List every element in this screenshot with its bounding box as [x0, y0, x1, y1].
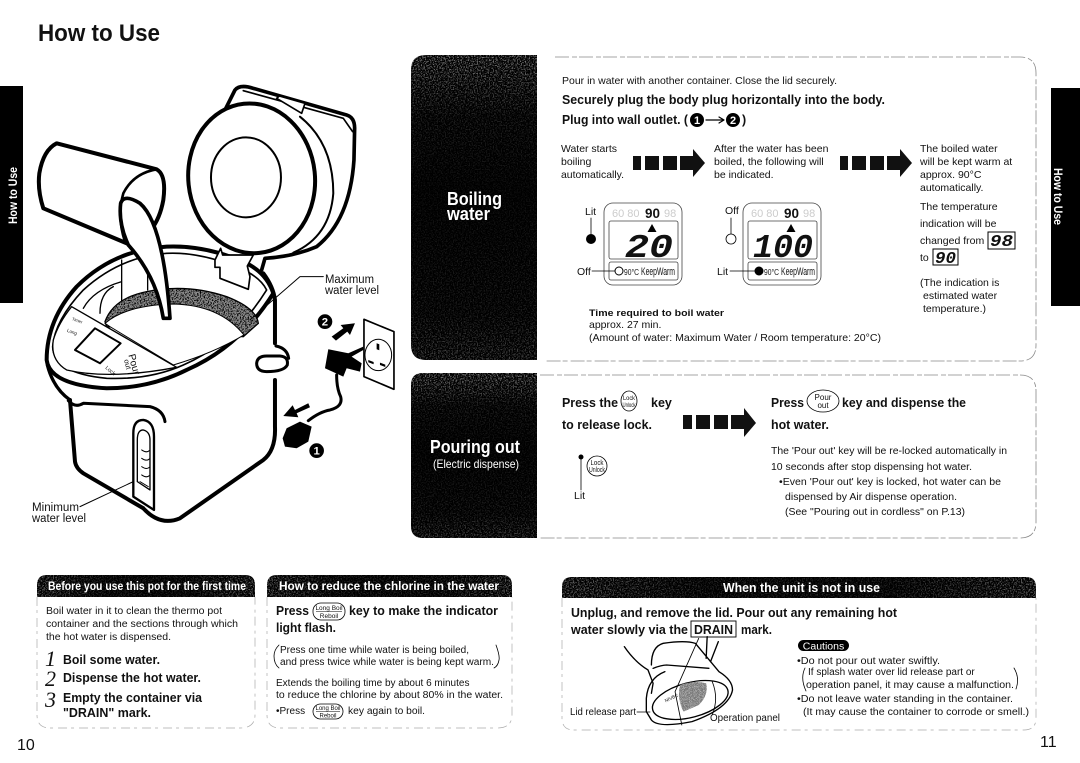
lock key indicator: Lit — [574, 490, 585, 502]
label: minimum water level — [31, 502, 86, 525]
arrow: plug into body — [283, 403, 310, 417]
label: off with circle — [725, 205, 739, 244]
temperature note: to — [920, 252, 929, 264]
bold instruction: Securely plug the body plug horizontally into the body. — [562, 93, 885, 107]
step: press pour out: Pour — [815, 393, 832, 402]
lid hinge — [215, 248, 253, 289]
heading with key — [276, 603, 498, 635]
display: 100: KeepWarm — [781, 266, 815, 278]
numbered steps: Dispense the hot water. — [63, 671, 201, 685]
title: How to Use — [38, 20, 160, 47]
panel: pouring out: Pouring out — [430, 437, 520, 457]
panel: pouring out — [411, 373, 537, 538]
step: release lock: to release lock. — [562, 418, 652, 432]
body text: container and the sections through which — [46, 619, 238, 630]
pot body — [68, 273, 275, 521]
bracketed note — [274, 645, 499, 668]
panel: boiling water — [411, 55, 537, 360]
instruction text: Pour in water with another container. Close the lid securely. — [562, 75, 837, 87]
heading: water slowly via the — [570, 623, 688, 637]
time required: Time required to boil water — [589, 308, 724, 319]
label: maximum water level — [324, 274, 379, 297]
press again note — [276, 704, 425, 720]
arrow: plug into outlet — [332, 323, 355, 341]
chlorine body text: to reduce the chlorine by about 80% in the water. — [276, 690, 503, 701]
body text: the hot water is dispensed. — [46, 632, 171, 643]
pour out notes: (See "Pouring out in cordless" on P.13) — [785, 506, 965, 518]
heading: DRAIN — [694, 623, 733, 637]
cautions text: (It may cause the container to corrode or smell.) — [803, 707, 1029, 718]
power plug and cord — [283, 347, 363, 448]
display: 20: 98 — [664, 208, 676, 220]
bold instruction with step numbers: 1 — [694, 115, 700, 127]
label: lit with dot: Lit — [585, 206, 596, 218]
step marker 2 — [318, 314, 332, 329]
time required: (Amount of water: Maximum Water / Room temperature: 20°C) — [589, 332, 881, 344]
bold instruction with step numbers: Plug into wall outlet. ( — [562, 113, 689, 127]
lock key indicator: Unlock — [589, 467, 605, 474]
label: minimum water level: Minimum — [32, 502, 79, 514]
panel: pouring out: (Electric dispense) — [433, 457, 519, 471]
step: press pour out: out — [817, 401, 829, 410]
step text: water starts: Water starts — [561, 143, 617, 155]
heading with key: light flash. — [276, 621, 336, 635]
step: press pour out: key and dispense the — [842, 396, 966, 410]
panel: before first use: Before you use this pot for the first time — [48, 579, 246, 593]
panel: reduce chlorine — [267, 575, 512, 728]
press again note: •Press — [276, 706, 305, 717]
step: release lock: Lock — [623, 395, 636, 402]
page number 10: 10 — [17, 737, 35, 754]
heading with key: Reboil — [320, 613, 339, 620]
label: lit: Lit — [717, 266, 728, 278]
time required: approx. 27 min. — [589, 319, 661, 331]
label: off with circle: Off — [725, 205, 739, 217]
step text: water starts — [561, 143, 624, 181]
panel: reduce chlorine: How to reduce the chlorine in the water — [279, 579, 499, 593]
heading with key: Press — [276, 604, 309, 618]
step text: water starts: automatically. — [561, 169, 624, 181]
water stream — [120, 198, 170, 318]
lock key indicator — [574, 454, 607, 502]
numbered steps: 2 — [45, 666, 56, 691]
step text: keep warm: approx. 90°C — [920, 169, 982, 181]
step: release lock: Press the — [562, 396, 618, 410]
lid — [181, 87, 355, 270]
step marker 1 — [309, 443, 324, 458]
heading with key: key to make the indicator — [349, 604, 498, 618]
label: minimum water level: water level — [31, 513, 86, 525]
cautions text: If splash water over lid release part or — [808, 667, 975, 678]
display: 100: 90°C — [764, 268, 779, 277]
display: 20: 90°C — [624, 268, 639, 277]
pot rim and opening — [47, 247, 273, 400]
arrow — [683, 408, 756, 437]
display: 20: 90 — [645, 205, 660, 221]
bold instruction with step numbers: 2 — [730, 115, 736, 127]
control panel: out — [122, 358, 133, 370]
body text: Boil water in it to clean the thermo pot — [46, 606, 222, 617]
label: lit — [717, 266, 755, 278]
bracketed note: and press twice while water is being kept warm. — [280, 657, 494, 668]
step: release lock: Unlock — [622, 402, 636, 409]
label: maximum water level: Maximum — [325, 274, 374, 286]
handle grip — [257, 346, 289, 372]
display: 100 — [743, 203, 821, 285]
panel: boiling instructions box — [545, 57, 1036, 361]
press again note: Reboil — [319, 714, 337, 720]
pour out notes — [771, 445, 1007, 518]
illustration: thermo pot with jug pouring water — [39, 87, 394, 521]
water gauge — [133, 420, 154, 510]
illustration: pot tilted to drain: NIVBC — [664, 692, 680, 703]
step text: keep warm: will be kept warm at — [919, 156, 1012, 168]
body text — [46, 606, 238, 643]
control panel: Long — [66, 328, 78, 336]
control panel: Pour — [125, 353, 142, 377]
press again note: Long Boil — [315, 706, 341, 712]
step: press pour out — [771, 390, 966, 432]
arrow — [633, 149, 705, 177]
numbered steps: "DRAIN" mark. — [63, 706, 151, 720]
display: 20: 60 80 — [612, 208, 640, 220]
label: lid release part: Lid release part — [570, 707, 636, 718]
panel: when the unit is not in use — [562, 577, 1036, 730]
step text: after boiled: boiled, the following will — [714, 156, 824, 168]
pour out notes: The 'Pour out' key will be re-locked automatically in — [771, 445, 1007, 457]
label: operation panel: Operation panel — [710, 713, 780, 724]
label: off: Off — [577, 266, 591, 278]
cautions badge: Cautions — [803, 640, 844, 652]
numbered steps — [44, 646, 203, 720]
label: lit with dot — [585, 206, 596, 244]
pour out notes: dispensed by Air dispense operation. — [785, 491, 957, 503]
panel: pouring instructions box — [540, 375, 1036, 538]
temperature note: changed from — [920, 235, 984, 247]
step marker 1: 1 — [313, 446, 320, 458]
cautions text: •Do not leave water standing in the container. — [797, 694, 1013, 705]
press again note: key again to boil. — [348, 706, 425, 717]
bold instruction with step numbers: ) — [742, 113, 746, 127]
display: 100: 60 80 — [751, 208, 779, 220]
label: off — [577, 266, 615, 278]
panel: boiling water: Boiling — [447, 189, 502, 209]
right side tab — [1051, 88, 1080, 306]
step text: keep warm: automatically. — [920, 182, 983, 194]
heading: mark. — [741, 623, 772, 637]
display: 20: KeepWarm — [641, 266, 675, 278]
display: 20 — [604, 203, 682, 285]
wall socket — [364, 319, 394, 389]
step text: after boiled: be indicated. — [714, 169, 774, 181]
bracketed note: Press one time while water is being boiled, — [280, 645, 469, 656]
left side tab — [0, 86, 23, 303]
estimated note: estimated water — [923, 290, 998, 302]
pour out notes: •Even 'Pour out' key is locked, hot water can be — [779, 476, 1001, 488]
step: press pour out: Press — [771, 396, 804, 410]
heading — [570, 606, 898, 637]
label: maximum water level: water level — [324, 285, 379, 297]
step: release lock: key — [651, 396, 672, 410]
right side tab: How to Use — [1051, 168, 1065, 225]
numbered steps: 1 — [45, 646, 56, 671]
temperature note: The temperature — [920, 201, 998, 213]
lock key indicator: Lock — [590, 460, 604, 467]
display: 100: 98 — [803, 208, 815, 220]
step text: keep warm: The boiled water — [920, 143, 998, 155]
pour out notes: 10 seconds after stop dispensing hot water. — [771, 461, 972, 473]
arrow — [840, 149, 912, 177]
page number 11: 11 — [1040, 734, 1057, 751]
time required — [589, 308, 881, 344]
jug — [39, 143, 164, 244]
step text: water starts: boiling — [561, 156, 592, 168]
left side tab: How to Use — [6, 167, 20, 224]
control panel — [53, 307, 177, 377]
control panel: Lock — [104, 365, 116, 377]
heading: Unplug, and remove the lid. Pour out any remaining hot — [571, 606, 898, 620]
display: 100: 90 — [784, 205, 799, 221]
display: 20: 20 — [625, 230, 673, 267]
estimated note: (The indication is — [920, 277, 999, 289]
indicator 90: 90 — [935, 250, 956, 269]
chlorine body text: Extends the boiling time by about 6 minutes — [276, 678, 469, 689]
numbered steps: Empty the container via — [63, 691, 203, 705]
heading with key: Long Boil — [315, 605, 343, 612]
step text: after boiled: After the water has been — [714, 143, 828, 155]
panel: when the unit is not in use: When the unit is not in use — [723, 581, 880, 595]
panel: before first use — [37, 575, 255, 728]
cautions text: •Do not pour out water swiftly. — [797, 656, 940, 667]
numbered steps: 3 — [44, 687, 56, 712]
illustration: pot tilted to drain — [624, 637, 733, 727]
temperature note: indication will be — [920, 218, 997, 230]
cautions text — [797, 656, 1029, 718]
step marker 2: 2 — [322, 317, 328, 329]
step: release lock — [562, 391, 672, 432]
leader lines — [80, 277, 323, 507]
numbered steps: Boil some water. — [63, 653, 160, 667]
control panel: Timer — [71, 316, 84, 325]
estimated note: temperature.) — [923, 303, 986, 315]
cautions text: operation panel, it may cause a malfunction. — [806, 680, 1014, 691]
panel: boiling water: water — [446, 204, 490, 224]
indicator 98: 98 — [990, 233, 1013, 252]
display: 100: 100 — [753, 230, 813, 267]
step: press pour out: hot water. — [771, 418, 829, 432]
